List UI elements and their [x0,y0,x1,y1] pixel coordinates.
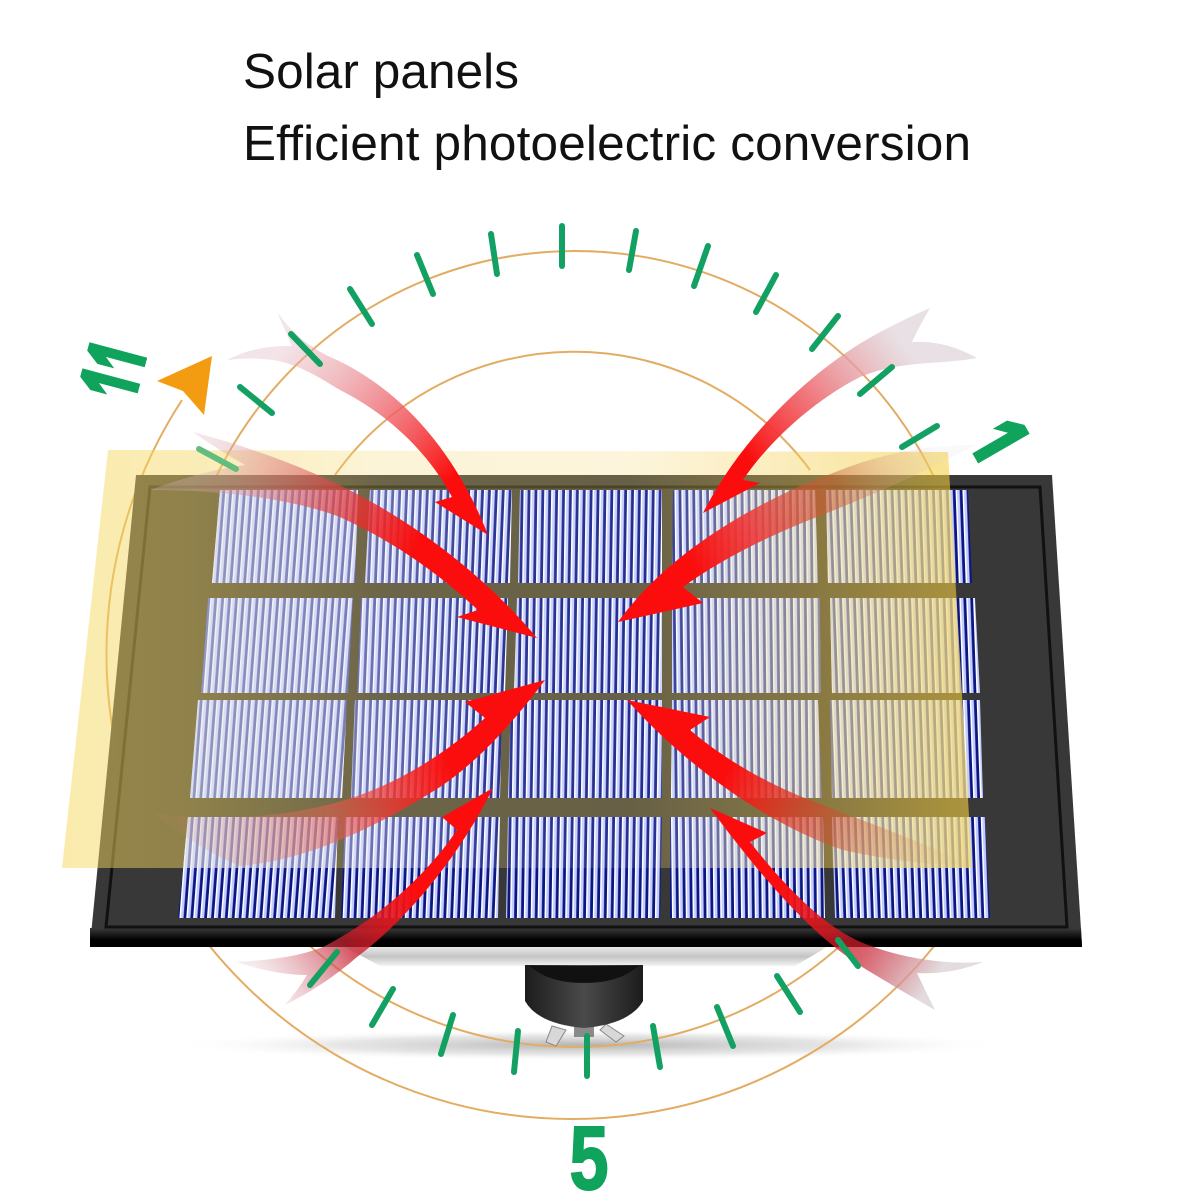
angle label 1: 1 [930,401,1052,494]
arrow: sunlight middle right [618,445,975,622]
arrow: sunlight top right [703,308,977,513]
solar cell grid [178,490,990,918]
rotation rings [106,251,973,1119]
title [243,44,971,171]
title: Solar panels [243,44,519,99]
panel: solar panel frame [90,475,1082,947]
angle label 11: 11 [58,329,189,415]
arrow: sunlight lower right [627,700,968,865]
arrow: sunlight bottom right [710,808,983,1010]
icon: orange rotation arrowhead [157,356,212,415]
arrow: sunlight top left [227,312,488,535]
mounting knob with bolts [525,965,643,1046]
title: Efficient photoelectric conversion [243,116,971,171]
arrow: sunlight middle left [150,432,537,638]
arrow: sunlight lower left [153,680,545,866]
arrow: sunlight bottom left [237,788,493,1005]
stand strip under panel [345,947,827,966]
ground shadow [170,1029,1010,1061]
yellow sunlight overlay [62,450,972,868]
angle tick marks [199,226,937,1076]
glare and tint on cells [183,490,972,868]
